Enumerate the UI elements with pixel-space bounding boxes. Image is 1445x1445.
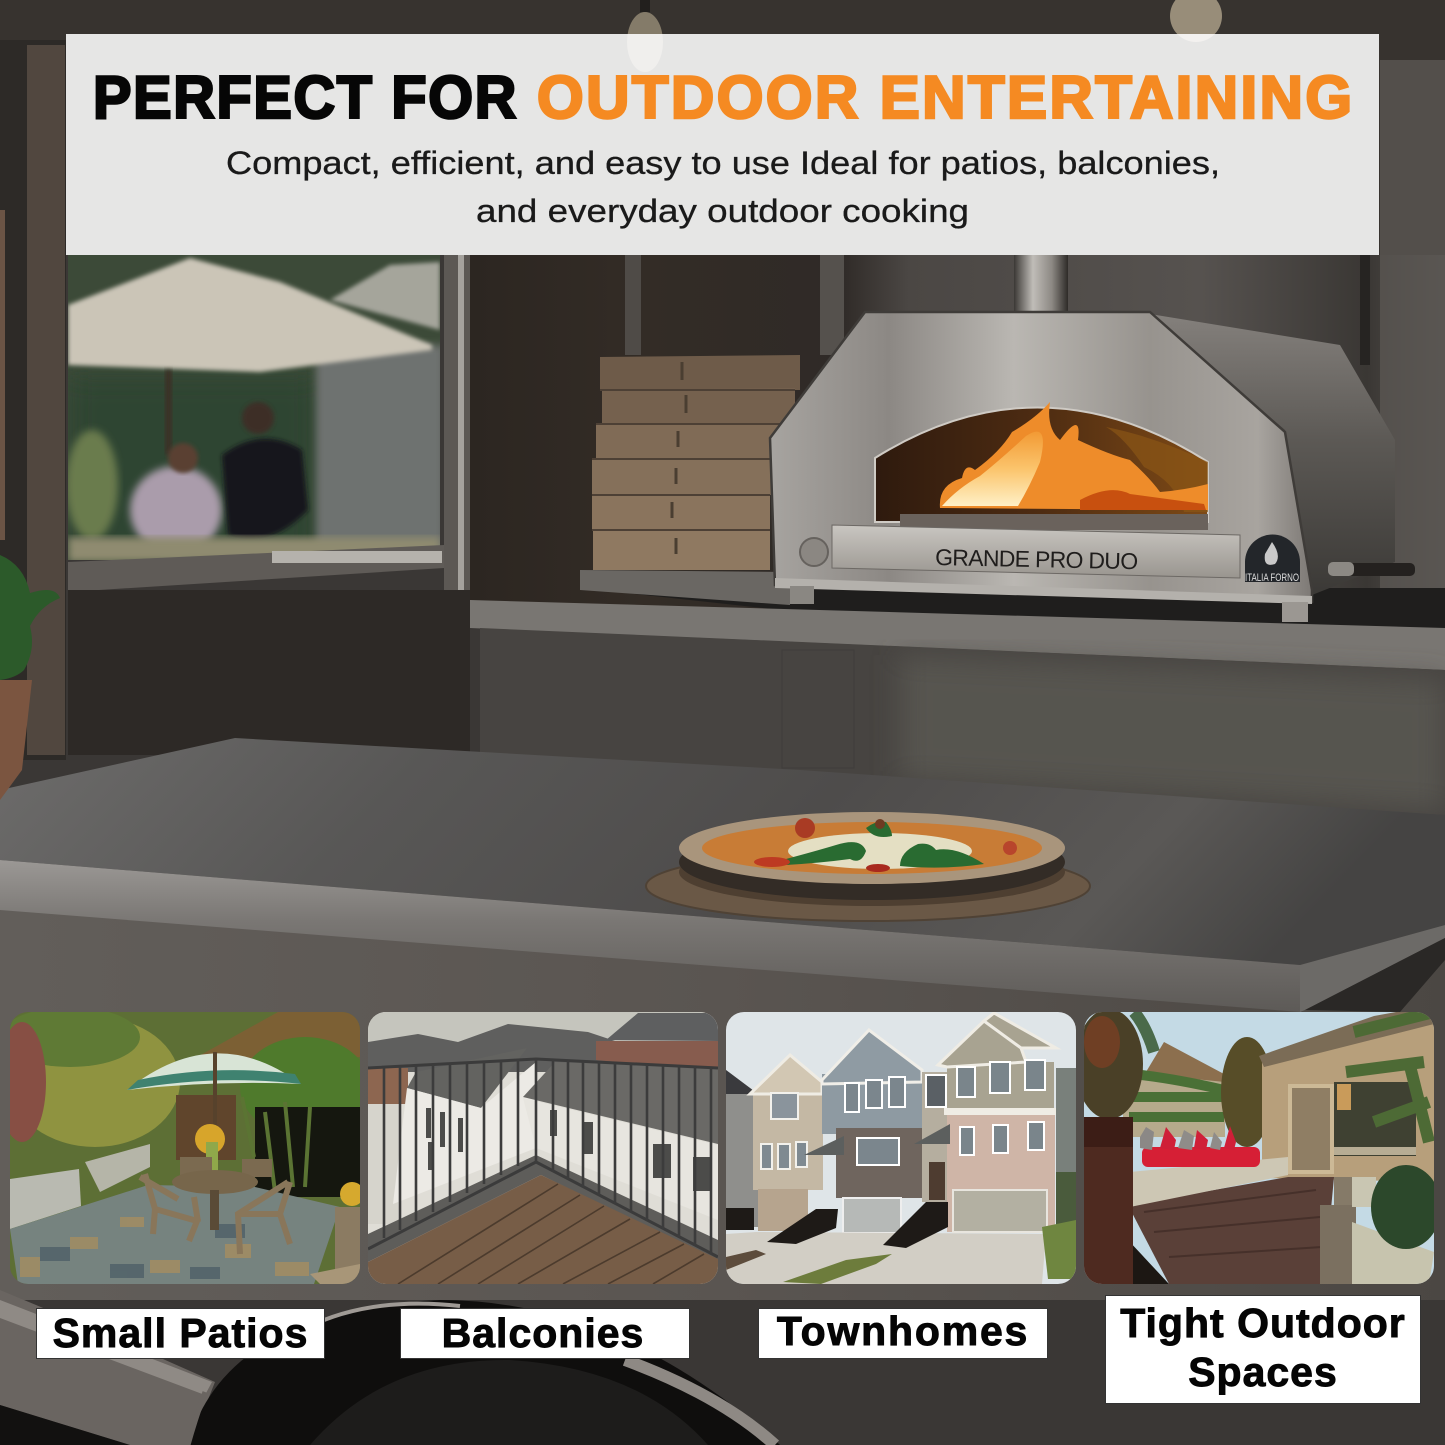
oven mouth and flame (875, 402, 1208, 530)
oven nameplate: GRANDE PRO DUO (935, 544, 1138, 574)
photo: small patio (10, 1012, 360, 1284)
oven logo (1245, 534, 1300, 584)
header panel (66, 34, 1379, 255)
label: townhomes: Townhomes (777, 1308, 1029, 1354)
label: tight outdoor spaces (1105, 1295, 1421, 1404)
pizza oven (770, 255, 1415, 622)
photo: townhomes (726, 1012, 1076, 1284)
wheel arch and tyre (0, 1290, 780, 1445)
string lights (627, 0, 1222, 72)
pizza on wooden peel (646, 812, 1090, 921)
window sill and frame (68, 255, 470, 755)
label: tight outdoor spaces: Tight Outdoor (1120, 1300, 1406, 1346)
pizza boxes (592, 355, 800, 570)
title (93, 64, 1352, 131)
oven base rail, feet, knob and handle (775, 538, 1415, 622)
counter top (0, 738, 1445, 1300)
window view with blurred patio (66, 255, 444, 562)
oven nameplate (832, 525, 1240, 578)
subtitle (226, 145, 1220, 229)
title: PERFECT FOR (93, 65, 516, 131)
label: balconies: Balconies (442, 1310, 644, 1356)
oven side (1150, 314, 1395, 595)
label: tight outdoor spaces: Spaces (1188, 1349, 1338, 1395)
oven body (770, 312, 1312, 602)
label: small patios: Small Patios (53, 1310, 308, 1356)
subtitle: Compact, efficient, and easy to use Ideal for patios, balconies, (226, 145, 1220, 181)
label: balconies (400, 1308, 690, 1359)
oven chimney (1014, 255, 1068, 313)
subtitle: and everyday outdoor cooking (476, 193, 969, 229)
shelf and cabinet (470, 570, 1445, 815)
oven logo: ITALIA FORNO (1245, 572, 1299, 584)
back wall (0, 0, 1445, 615)
title: OUTDOOR ENTERTAINING (537, 64, 1352, 131)
photo: tight outdoor space (1084, 1012, 1434, 1284)
left post (0, 40, 66, 760)
photo: balcony (368, 1012, 718, 1284)
plant in pot (0, 555, 60, 800)
